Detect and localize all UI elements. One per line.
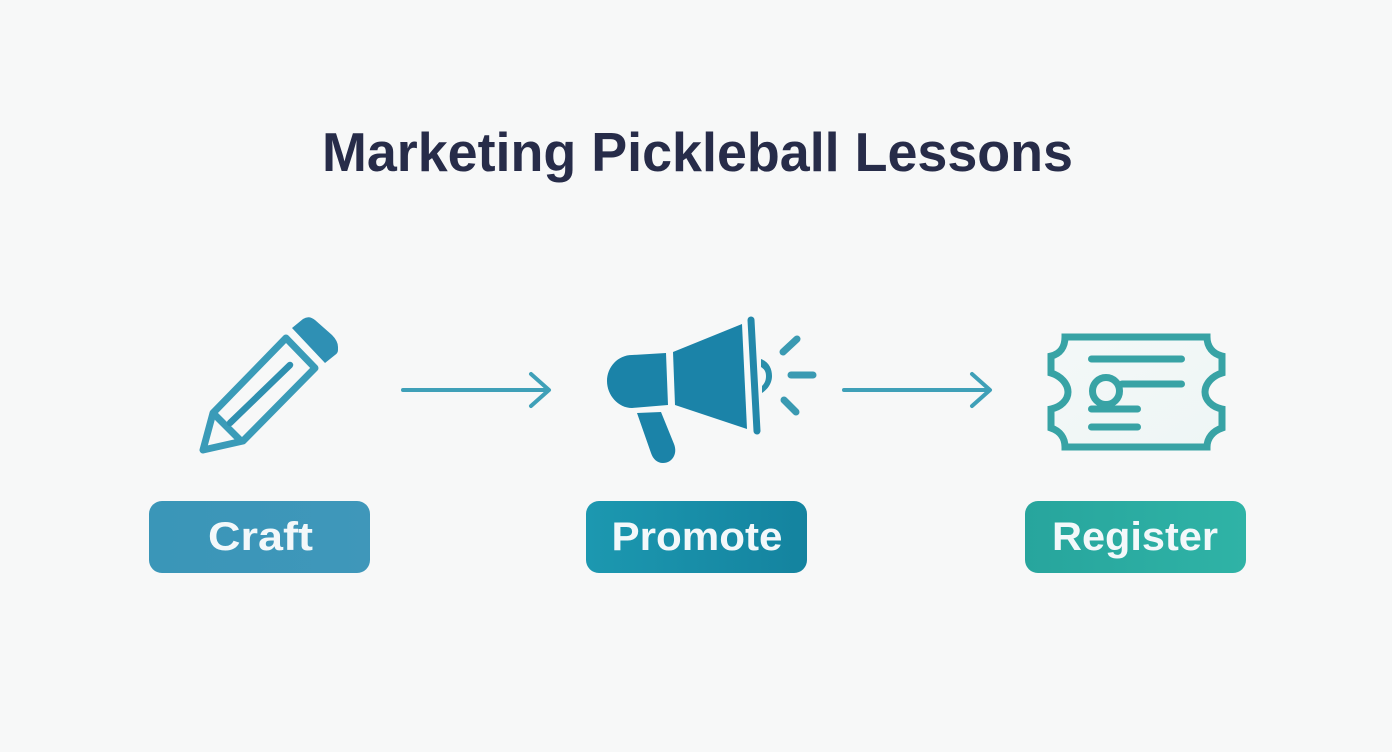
button: Craft xyxy=(149,501,370,573)
button: Register xyxy=(1025,501,1246,573)
icon: ticket xyxy=(1051,337,1222,447)
arrow: craft to promote xyxy=(403,374,549,406)
icon: megaphone xyxy=(607,320,813,463)
button: Register: Register xyxy=(1052,515,1218,559)
arrow: promote to register xyxy=(844,374,990,406)
title: Marketing Pickleball Lessons xyxy=(322,121,1073,183)
button: Promote xyxy=(586,501,807,573)
icon: pencil xyxy=(203,317,338,450)
button: Promote: Promote xyxy=(612,515,782,559)
button: Craft: Craft xyxy=(208,515,313,559)
